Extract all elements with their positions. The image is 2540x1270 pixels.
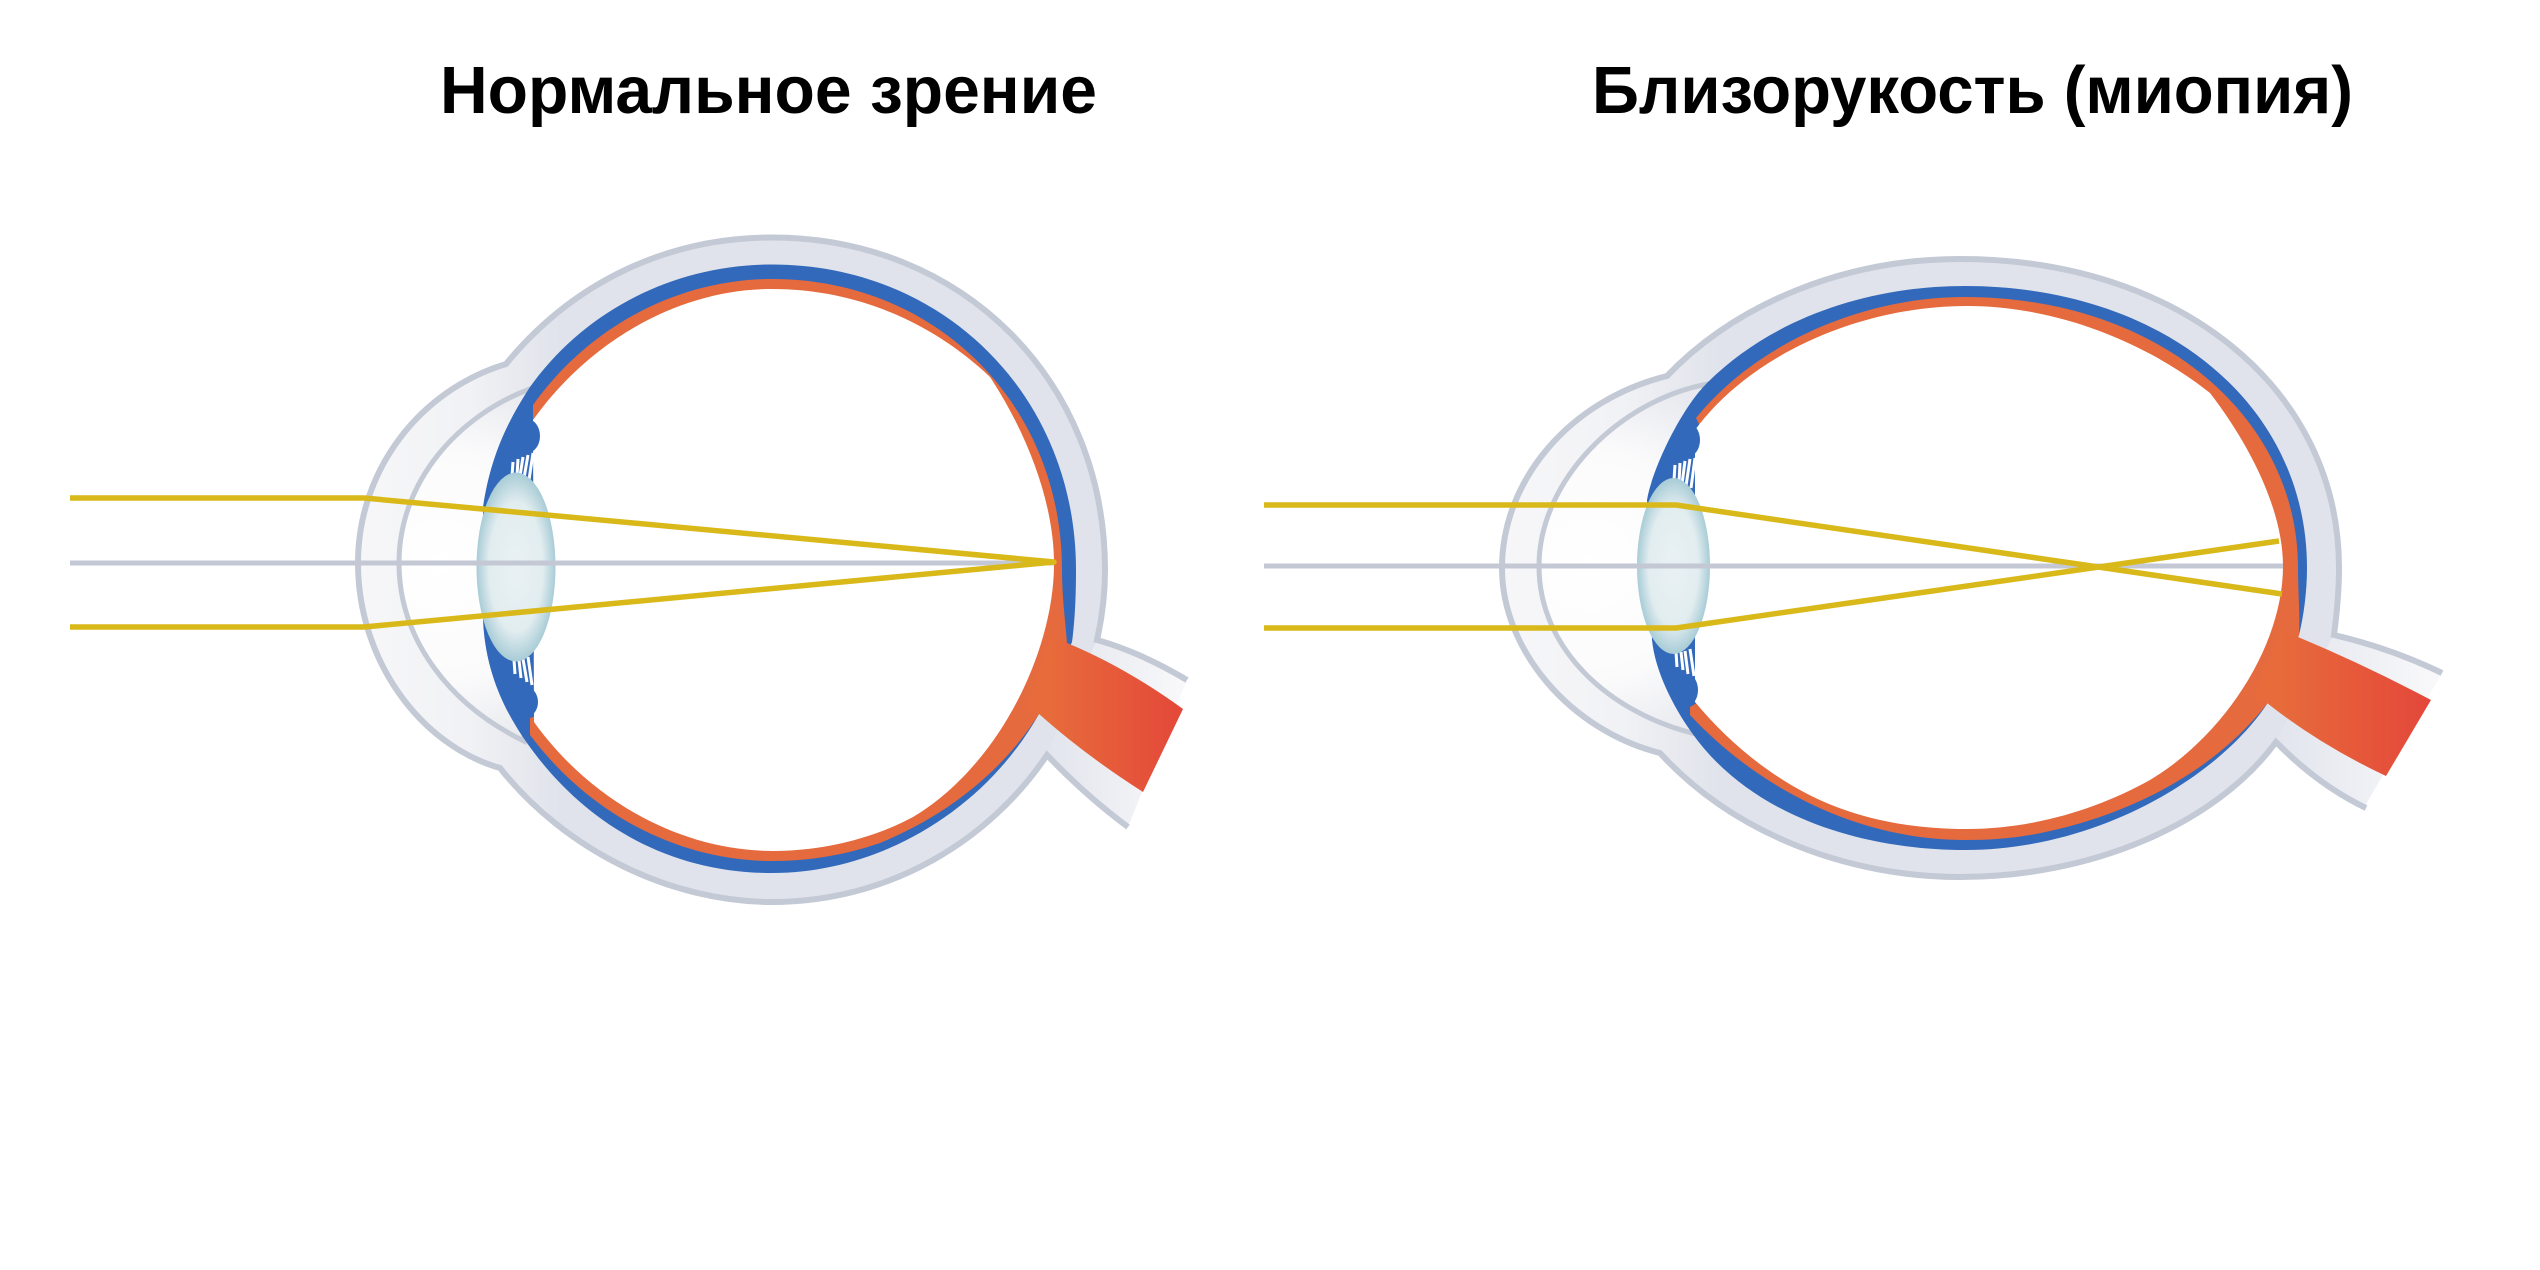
inner cornea bbox=[399, 389, 530, 741]
ciliary body lower bbox=[1676, 674, 1698, 706]
zonule fibres bbox=[512, 453, 533, 685]
ciliary body lower bbox=[514, 687, 538, 717]
vitreous body bbox=[1695, 306, 2283, 829]
retina orange layer bbox=[530, 279, 1067, 861]
sclera and sheath outline bbox=[1502, 259, 2442, 877]
lens bbox=[1637, 478, 1710, 654]
choroid blue layer bbox=[483, 264, 1076, 873]
ciliary body upper bbox=[514, 419, 540, 453]
lens bbox=[476, 472, 556, 662]
optic nerve bbox=[1025, 636, 1183, 792]
title: normal vision: Нормальное зрение bbox=[440, 53, 1097, 128]
axis line bbox=[70, 560, 1054, 566]
zonule fibres bbox=[1674, 458, 1695, 676]
sclera and sheath outline bbox=[358, 238, 1187, 902]
optic nerve bbox=[2252, 630, 2431, 776]
optic nerve sheath bbox=[2276, 635, 2442, 806]
retina orange layer bbox=[1690, 297, 2299, 840]
light rays bbox=[70, 498, 1054, 627]
diagram: myopic eye bbox=[1264, 259, 2442, 877]
sclera and cornea fill bbox=[1502, 259, 2339, 877]
title: myopia: Близорукость (миопия) bbox=[1592, 53, 2353, 128]
inner cornea bbox=[1539, 384, 1708, 733]
light rays bbox=[1264, 505, 2282, 628]
ciliary body upper bbox=[1678, 424, 1700, 456]
sclera and cornea fill bbox=[358, 238, 1105, 902]
optic nerve sheath bbox=[1047, 640, 1187, 827]
axis line bbox=[1264, 564, 2283, 568]
diagram: normal eye bbox=[70, 238, 1187, 902]
vitreous body bbox=[533, 289, 1054, 851]
choroid blue layer bbox=[1647, 286, 2307, 850]
